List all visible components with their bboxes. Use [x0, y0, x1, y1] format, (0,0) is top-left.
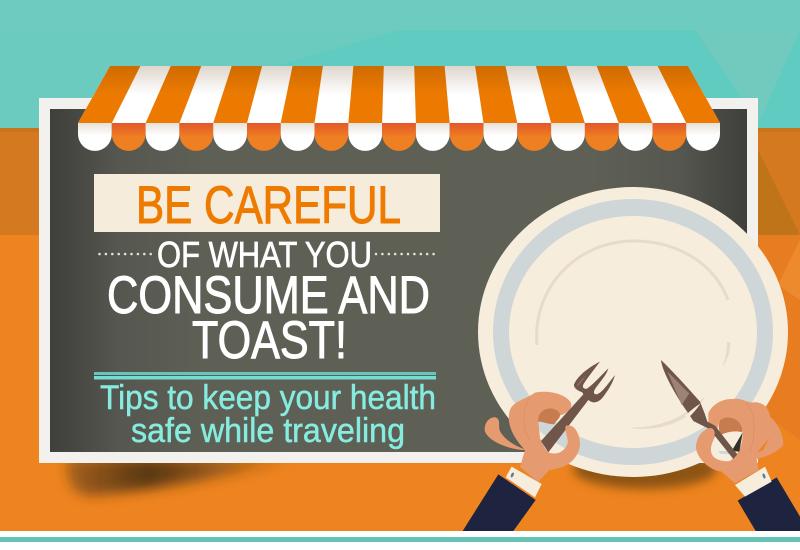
chalkboard panel — [39, 98, 758, 463]
awning — [78, 66, 720, 151]
double teal rule — [94, 372, 436, 380]
heading: consume and toast: TOAST! — [192, 311, 347, 370]
right hand fingers and knife — [661, 360, 783, 483]
awning canopy stripes — [78, 66, 720, 123]
subtitle: safe while traveling — [131, 412, 405, 450]
icon: right hand holding knife — [661, 360, 800, 531]
board shadow — [67, 458, 300, 496]
left sleeve and cuff — [463, 467, 542, 531]
icon: left hand holding fork — [463, 362, 615, 531]
right sleeve and cuff — [735, 467, 800, 531]
subtitle: Tips to keep your health — [100, 379, 436, 417]
heading: of what you with dotted rules: OF WHAT YOU — [157, 234, 372, 275]
title banner: be careful: BE CAREFUL — [136, 176, 401, 235]
awning scallops — [78, 123, 720, 151]
plate shadow — [573, 449, 717, 489]
footer teal rule — [0, 531, 800, 550]
heading: consume and toast — [107, 266, 430, 370]
plate — [478, 187, 788, 477]
heading: consume and toast: CONSUME AND — [107, 266, 430, 325]
subtitle — [100, 379, 436, 450]
left hand fingers and fork — [485, 362, 615, 482]
